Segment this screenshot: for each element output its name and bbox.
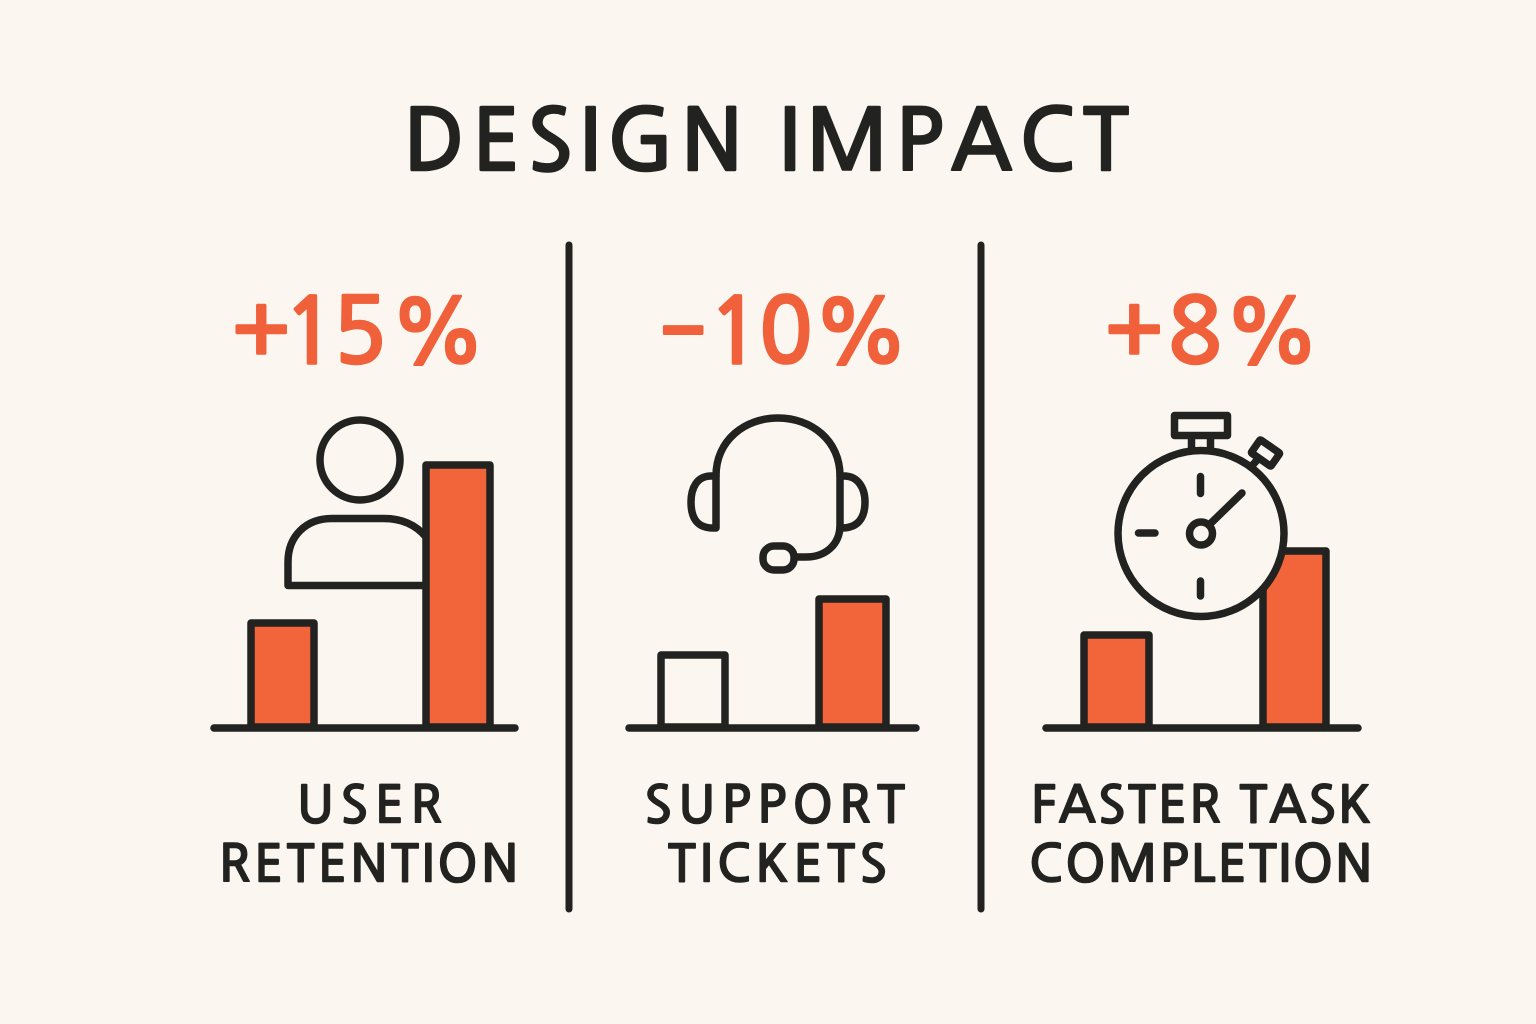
bar chart: task completion: [1046, 551, 1358, 728]
divider left: [566, 245, 572, 909]
panel: user retention: [214, 287, 518, 890]
icon: stopwatch: [1118, 416, 1284, 616]
label: faster task completion: FASTER TASK: [1030, 779, 1372, 831]
metric: +8%: %: [1224, 291, 1320, 378]
icon: headset: [691, 418, 865, 570]
label: faster task completion: COMPLETION: [1028, 838, 1372, 890]
label: user retention: USER: [296, 779, 442, 831]
label: support tickets: TICKETS: [668, 838, 888, 890]
metric: +8%: +8: [1104, 287, 1223, 378]
title: DESIGN IMPACT: [403, 99, 1129, 184]
metric: -10%: %: [813, 291, 909, 378]
label: support tickets: SUPPORT: [644, 779, 906, 831]
metric: +15%: +15: [231, 287, 388, 378]
metric: -10%: 10: [707, 287, 814, 378]
panel: support tickets: [629, 287, 916, 890]
bar chart: user retention: [214, 465, 515, 728]
label: user retention: RETENTION: [218, 838, 518, 890]
metric: +15%: %: [390, 291, 486, 378]
label: support tickets: [644, 779, 906, 890]
label: faster task completion: [1028, 779, 1372, 890]
icon: user: [288, 420, 426, 586]
label: user retention: [218, 779, 518, 890]
metric: -10%: −: [658, 299, 708, 358]
bar chart: support tickets: [629, 599, 916, 728]
panel: faster task completion: [1028, 287, 1372, 890]
divider right: [978, 245, 984, 909]
